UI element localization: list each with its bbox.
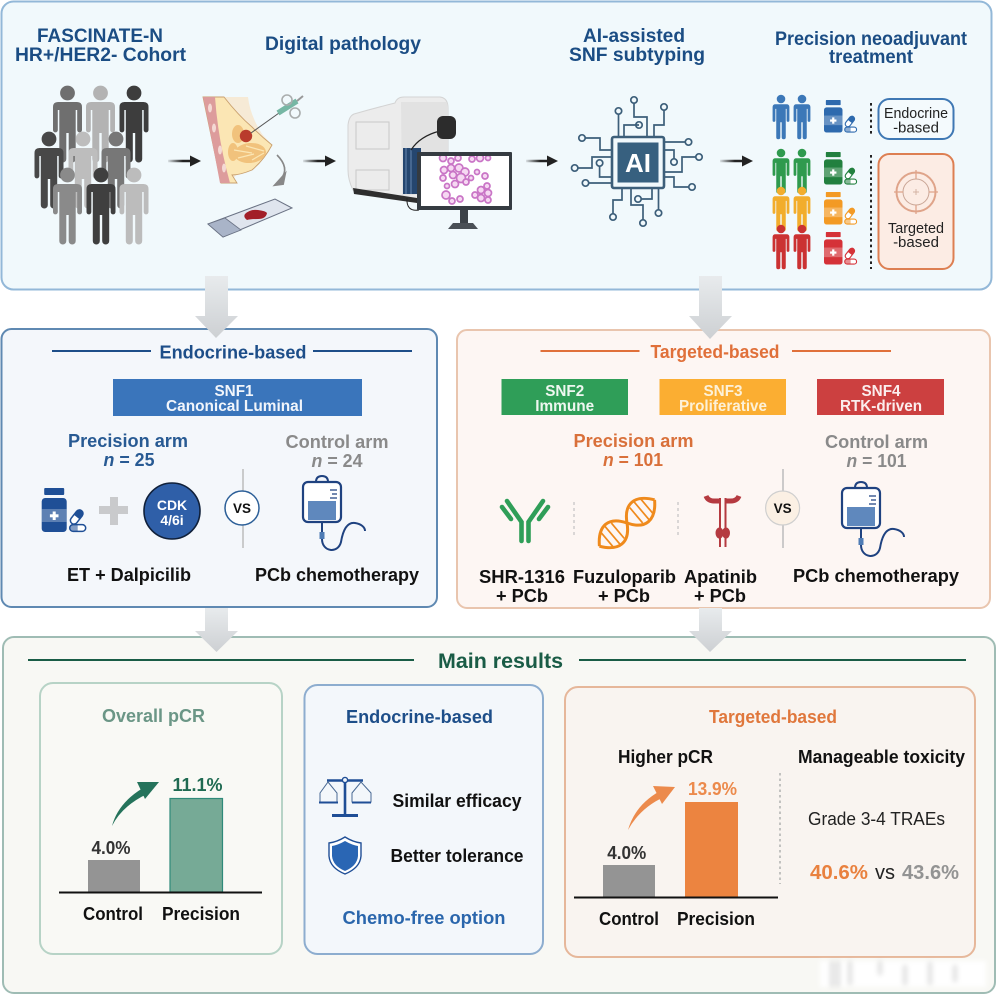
label: SNF3: SNF3 — [704, 383, 743, 400]
bar chart: targeted pCR: Control — [599, 908, 659, 929]
heading: manageable toxicity: Manageable toxicity — [798, 746, 966, 767]
icon: balance scale — [319, 777, 371, 816]
label: control arm — [286, 431, 388, 471]
icon: AI chip — [572, 97, 702, 226]
icon: blue patients — [773, 95, 810, 139]
arrow: workflow to targeted arm — [689, 276, 732, 339]
icon: green patients — [773, 149, 810, 193]
heading: digital pathology: Digital pathology — [265, 33, 421, 55]
callout: endocrine-based: Endocrine — [884, 105, 948, 122]
icon: yellow drugs — [824, 192, 857, 225]
icon: chemotherapy infusion bag — [303, 476, 365, 550]
heading: precision treatment: Precision neoadjuvant — [775, 29, 968, 50]
label: SHR-1316 + PCb: + PCb — [496, 585, 548, 606]
arrow: targeted arm to results — [689, 608, 732, 652]
panel: main results — [3, 637, 995, 993]
label: better tolerance: Better tolerance — [390, 845, 524, 866]
label: TRAE rates: vs — [875, 862, 895, 884]
label: Apatinib + PCb: + PCb — [694, 585, 746, 606]
label: SNF2: SNF2 — [545, 383, 584, 400]
bar chart: overall pCR: 4.0% — [92, 837, 130, 858]
icon: VS divider: VS — [774, 501, 792, 516]
panel: targeted-based arm — [457, 330, 990, 608]
icon: CDK 4/6i: 4/6i — [160, 512, 184, 528]
bar chart: overall pCR: Control — [83, 903, 143, 924]
icon: VS divider — [766, 469, 800, 548]
bar chart: overall pCR: 11.1% — [172, 774, 222, 795]
heading: cohort — [15, 25, 187, 66]
arrow: workflow to endocrine arm — [195, 276, 238, 338]
bar chart: targeted pCR: 13.9% — [688, 778, 737, 799]
bar chart: overall pCR — [59, 774, 262, 924]
bar chart: overall pCR: Precision — [162, 903, 240, 924]
arrow: biopsy to scanner — [303, 156, 336, 166]
label: ET + Dalpicilib: ET + Dalpicilib — [67, 564, 191, 585]
label: precision arm: Precision arm — [574, 430, 694, 451]
icon: shield — [329, 837, 361, 874]
label: SHR-1316 + PCb — [479, 566, 565, 606]
icon: blue drugs — [824, 100, 857, 133]
label: SHR-1316 + PCb: SHR-1316 — [479, 566, 565, 587]
callout: endocrine-based — [878, 99, 954, 139]
callout: targeted-based: -based — [893, 234, 939, 251]
label: control arm: n = 24 — [312, 450, 363, 471]
arrow: cohort to biopsy — [168, 156, 201, 166]
callout: targeted-based: Targeted — [888, 220, 944, 237]
label: SNF4 — [817, 379, 944, 415]
label: Fuzuloparib + PCb — [573, 566, 676, 606]
panel: study workflow — [2, 2, 992, 290]
arrow: scanner to AI — [526, 156, 558, 166]
callout: targeted-based — [878, 154, 954, 269]
label: similar efficacy: Similar efficacy — [392, 790, 522, 811]
heading: higher pCR: Higher pCR — [618, 746, 713, 767]
icon: receptor — [706, 496, 739, 547]
label: TRAE rates: 40.6% — [810, 861, 868, 884]
heading: endocrine-based: Endocrine-based — [160, 342, 306, 362]
icon: red patients — [773, 225, 810, 269]
icon: chemotherapy infusion bag — [842, 482, 904, 556]
bar chart: targeted pCR — [574, 778, 778, 929]
heading: targeted-based: Targeted-based — [650, 341, 780, 362]
label: control arm: n = 101 — [846, 450, 906, 471]
panel: endocrine-based arm — [2, 329, 437, 607]
label: control arm: Control arm — [286, 431, 388, 452]
icon: breast biopsy — [203, 95, 303, 185]
label: precision arm: Precision arm — [68, 430, 188, 451]
icon: VS divider: VS — [233, 501, 251, 516]
icon: plus — [99, 497, 128, 525]
heading: AI subtyping: SNF subtyping — [569, 44, 705, 66]
icon: red drugs — [824, 232, 857, 265]
icon: monitor with histology image — [417, 152, 512, 229]
heading: main results: Main results — [438, 650, 563, 673]
label: Fuzuloparib + PCb: + PCb — [598, 585, 650, 606]
heading: cohort: FASCINATE-N — [37, 25, 163, 47]
label: SNF3 — [660, 379, 786, 415]
label: TRAE rates — [810, 861, 959, 884]
label: SNF3: Proliferative — [679, 398, 767, 415]
icon: green drugs — [824, 152, 857, 185]
label: precision arm — [574, 430, 694, 470]
heading: precision treatment — [775, 29, 968, 68]
label: SNF1: Canonical Luminal — [166, 398, 303, 415]
label: control arm — [825, 431, 928, 471]
bar chart: targeted pCR: 4.0% — [607, 842, 646, 863]
icon: CDK 4/6i — [144, 483, 200, 539]
panel: overall pCR — [40, 683, 282, 954]
label: control arm: Control arm — [825, 431, 928, 452]
label: SNF1 — [113, 379, 362, 416]
icon: patient cohort — [34, 86, 148, 244]
icon: VS divider — [225, 469, 259, 548]
heading: precision treatment: treatment — [829, 47, 914, 68]
label: TRAE rates: 43.6% — [902, 861, 959, 884]
label: precision arm — [68, 430, 188, 470]
label: precision arm: n = 25 — [104, 449, 154, 470]
label: chemo-free option: Chemo-free option — [342, 907, 506, 928]
heading: AI subtyping: AI-assisted — [583, 25, 685, 47]
bar chart: targeted pCR: Precision — [677, 908, 755, 929]
icon: CDK 4/6i: CDK — [157, 497, 187, 513]
panel: targeted-based result — [565, 687, 975, 957]
heading: AI subtyping — [569, 25, 705, 66]
arrow: AI to treatment — [720, 156, 753, 166]
icon: slide scanner — [348, 97, 456, 210]
callout: endocrine-based: -based — [893, 120, 939, 136]
icon: AI chip: AI — [625, 148, 651, 178]
label: Apatinib + PCb — [684, 566, 757, 606]
heading: targeted-based: Targeted-based — [709, 706, 837, 727]
icon: tissue slide — [208, 199, 292, 237]
label: SNF4: RTK-driven — [840, 398, 922, 415]
heading: overall pCR: Overall pCR — [102, 705, 205, 726]
icon: yellow patients — [773, 187, 810, 231]
label: grade 3-4 TRAEs: Grade 3-4 TRAEs — [808, 809, 945, 829]
label: precision arm: n = 101 — [603, 449, 663, 470]
label: SNF2: Immune — [535, 398, 595, 415]
label: PCb chemotherapy: PCb chemotherapy — [793, 565, 960, 586]
panel: endocrine-based result — [304, 685, 543, 954]
icon: DNA helix — [591, 490, 663, 556]
arrow: endocrine arm to results — [195, 608, 238, 652]
icon: antibody — [502, 501, 548, 541]
label: PCb chemotherapy: PCb chemotherapy — [255, 564, 420, 585]
icon: endocrine therapy drugs — [42, 488, 86, 532]
label: SNF2 — [502, 379, 628, 415]
label: SNF1: SNF1 — [214, 383, 254, 400]
heading: cohort: HR+/HER2- Cohort — [15, 44, 187, 66]
label: Apatinib + PCb: Apatinib — [684, 566, 757, 587]
heading: endocrine-based: Endocrine-based — [346, 706, 493, 727]
label: SNF4: SNF4 — [862, 383, 901, 400]
label: Fuzuloparib + PCb: Fuzuloparib — [573, 566, 676, 587]
